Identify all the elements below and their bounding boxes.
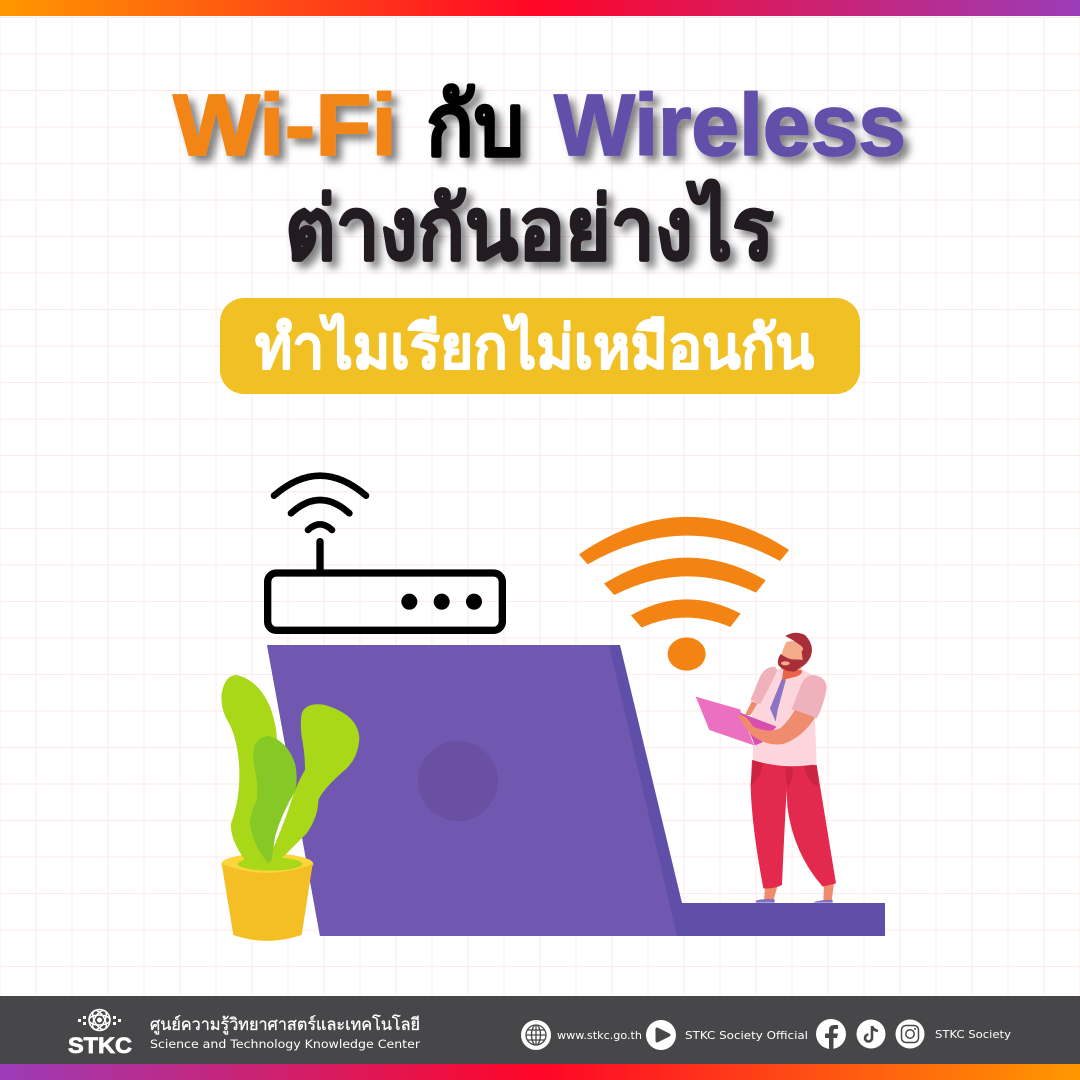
illustration: plant [221, 675, 359, 941]
footer band [0, 996, 1080, 1064]
icon: tiktok [856, 1020, 886, 1048]
icon: globe [521, 1020, 551, 1050]
youtube name: STKC Society Official [685, 1029, 808, 1042]
subtitle pill: ทำไมเรียกไม่เหมือนกัน [255, 312, 814, 381]
icon: laptop [267, 645, 885, 936]
bottom gradient bar [0, 1064, 1080, 1080]
icon: wifi signal [579, 517, 789, 671]
logo: STKC [68, 1008, 132, 1058]
organisation name [150, 1014, 420, 1051]
website: www.stkc.go.th [557, 1029, 642, 1042]
illustration: man with laptop [696, 633, 836, 903]
instagram name: STKC Society [935, 1028, 1012, 1041]
title [173, 77, 906, 278]
icon: router [268, 476, 502, 630]
title: ต่างกันอย่างไร [285, 179, 774, 278]
subtitle pill [220, 298, 860, 394]
organisation name: ศูนย์ความรู้วิทยาศาสตร์และเทคโนโลยี [150, 1014, 420, 1035]
logo: STKC: STKC [68, 1033, 132, 1058]
title: กับ [426, 77, 524, 174]
organisation name: Science and Technology Knowledge Center [150, 1037, 420, 1051]
icon: instagram [896, 1020, 924, 1048]
title: Wi-Fi [173, 77, 397, 174]
icon: play [646, 1020, 676, 1050]
top gradient bar [0, 0, 1080, 16]
icon: facebook [816, 1019, 846, 1049]
title: Wireless [554, 77, 906, 174]
